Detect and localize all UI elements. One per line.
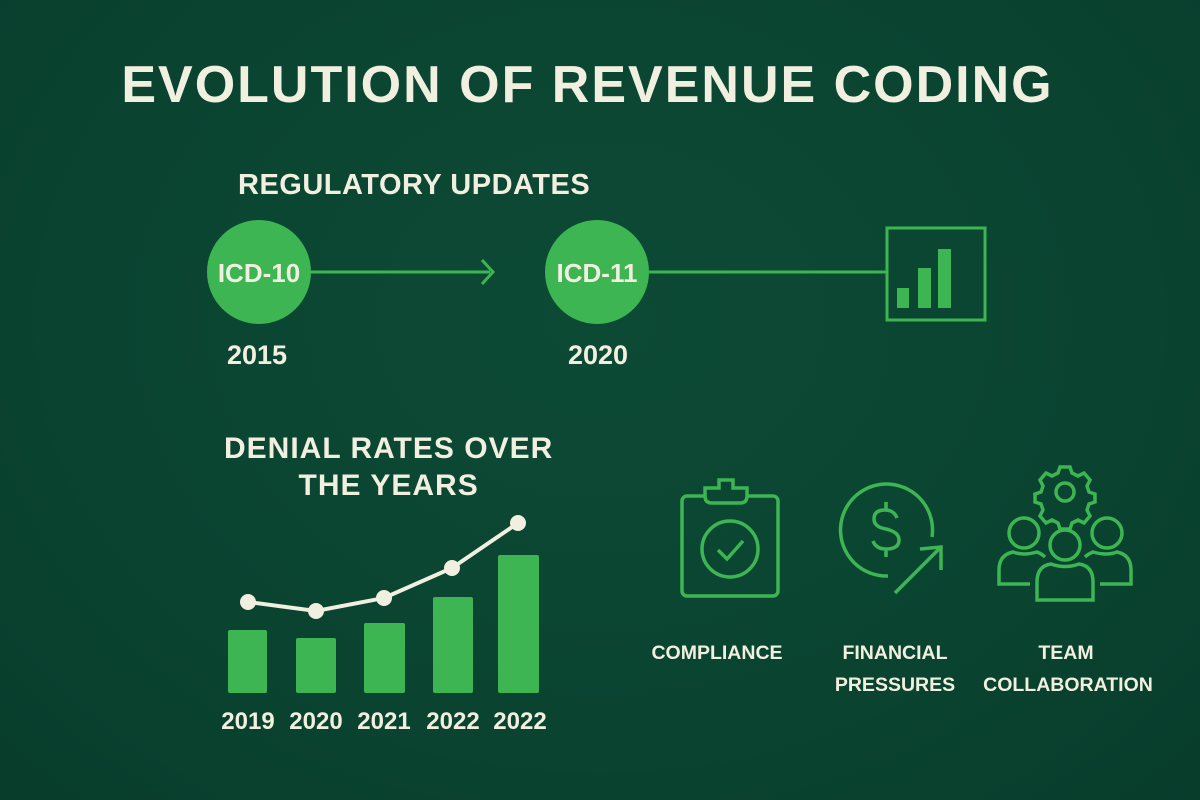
year labels: 2015: [227, 340, 287, 370]
title: EVOLUTION OF REVENUE CODING: [121, 56, 1054, 114]
heading: denial rates: DENIAL RATES OVER: [224, 432, 553, 465]
icon: compliance clipboard: [682, 480, 778, 596]
icon labels: COMPLIANCE: [651, 642, 783, 664]
x-axis years: 2022: [426, 708, 480, 735]
icon: bar chart box: [887, 228, 985, 320]
icon labels: TEAM: [1038, 642, 1094, 664]
x-axis years: 2022: [493, 708, 547, 735]
bar chart: denial rates: [221, 515, 547, 735]
year labels: 2020: [568, 340, 628, 370]
year labels: [227, 340, 628, 370]
timeline connector lines: [300, 260, 887, 284]
x-axis years: 2021: [357, 708, 411, 735]
heading: denial rates: THE YEARS: [299, 469, 479, 502]
node: ICD-11: [545, 220, 649, 324]
icon labels: [651, 642, 1153, 696]
x-axis years: 2020: [289, 708, 343, 735]
trend line: [240, 515, 526, 619]
icon labels: PRESSURES: [835, 674, 955, 696]
node: ICD-11: ICD-11: [557, 258, 637, 288]
heading: denial rates: [224, 432, 553, 502]
icon: team collaboration: [999, 467, 1131, 600]
icon labels: COLLABORATION: [983, 674, 1153, 696]
icon labels: FINANCIAL: [842, 642, 948, 664]
x-axis years: [221, 708, 547, 735]
heading: regulatory updates: REGULATORY UPDATES: [238, 169, 590, 201]
node: ICD-10: [207, 220, 311, 324]
node: ICD-10: ICD-10: [218, 258, 300, 288]
x-axis years: 2019: [221, 708, 275, 735]
icon: financial pressures: [841, 484, 941, 593]
